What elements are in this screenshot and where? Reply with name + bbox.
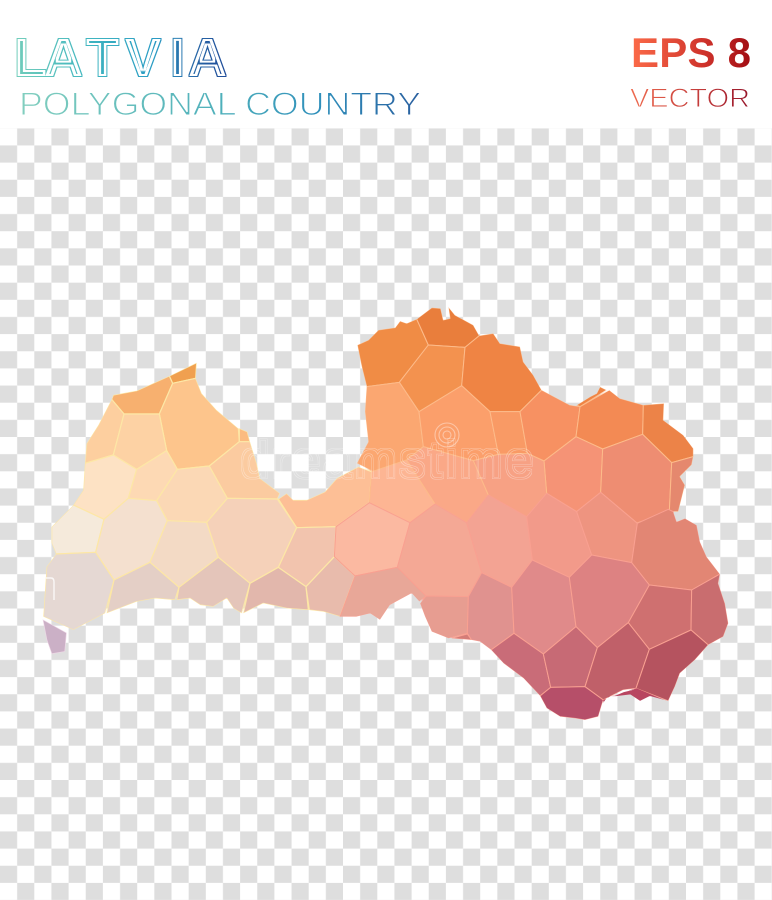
watermark fragment at the western edge [46, 578, 54, 600]
map cells: northern and eastern Latvia [357, 307, 693, 523]
polygonal map of Latvia [43, 307, 728, 720]
title: LATVIA: LATVIA [14, 28, 227, 88]
subtitle: POLYGONAL COUNTRY: POLYGONAL COUNTRY [19, 86, 421, 122]
watermark: spiral logo [435, 423, 459, 447]
badge: EPS 8: EPS 8 [631, 29, 751, 76]
map cells: southern Latvia [334, 492, 728, 720]
map cells: western Latvia [43, 363, 372, 654]
badge: VECTOR: VECTOR [630, 83, 750, 113]
watermark: dreamstime: dreamstime [241, 432, 533, 488]
